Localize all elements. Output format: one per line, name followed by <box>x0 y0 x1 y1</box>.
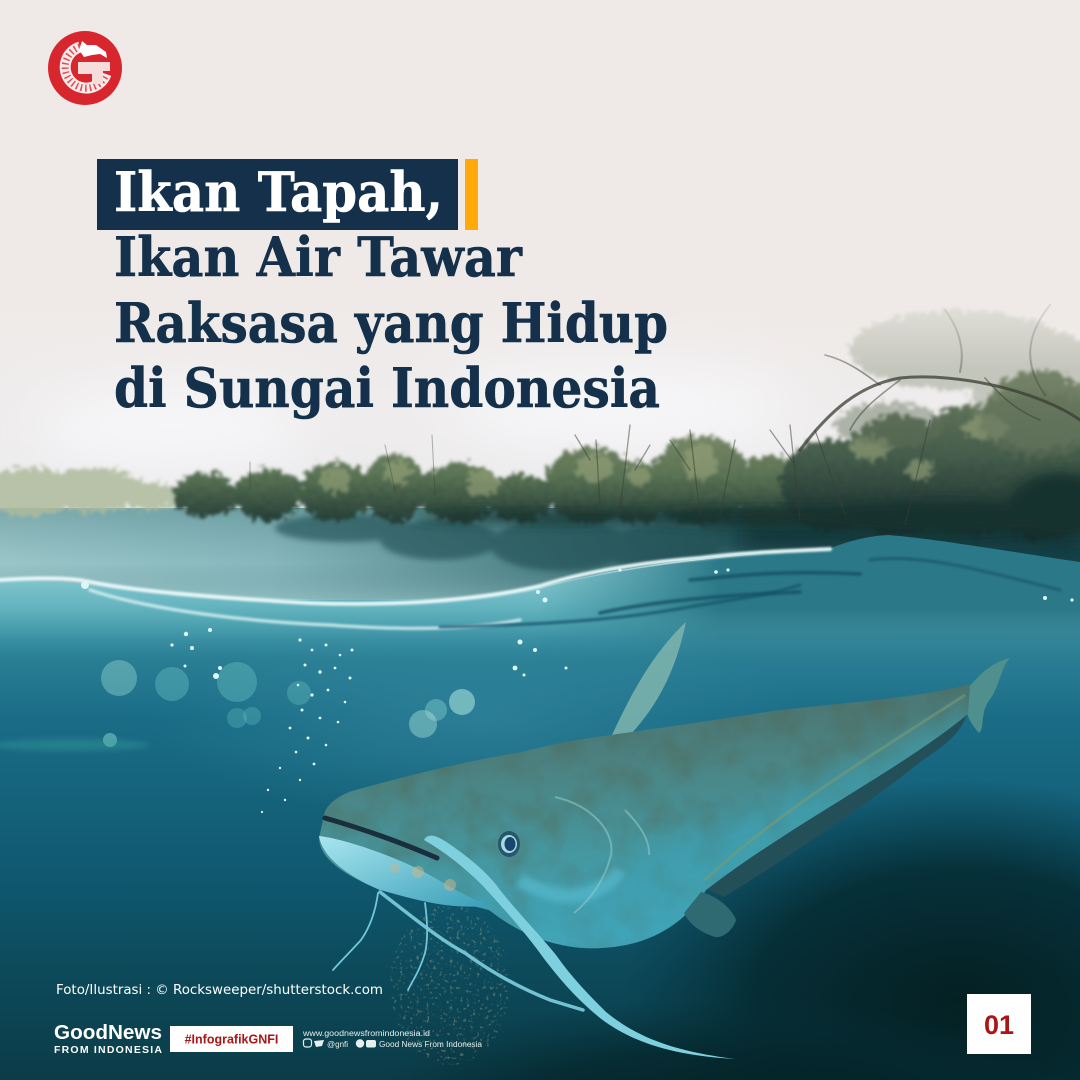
logo ring pattern <box>65 47 106 88</box>
brand wordmark <box>54 1022 162 1056</box>
logo ring <box>65 47 106 88</box>
website and social handles <box>302 1029 483 1049</box>
title highlight bar <box>97 159 458 230</box>
underwater body <box>0 600 1080 1080</box>
brand wordmark: GoodNews <box>54 1022 162 1044</box>
fish: eye <box>498 831 520 857</box>
water swell on the right <box>558 535 1080 647</box>
logo eagle head <box>79 41 107 58</box>
water surface highlight line <box>0 549 1060 628</box>
photo background: sky <box>0 0 1080 540</box>
website and social handles: www.goodnewsfromindonesia.id <box>302 1029 430 1038</box>
logo G bar <box>78 62 110 84</box>
fish: pectoral fin <box>684 892 736 937</box>
tree branches <box>250 305 1080 525</box>
dark shoreline foliage <box>410 473 1080 537</box>
river bank tree mass <box>173 436 810 524</box>
riverbed sand particles <box>390 863 510 1065</box>
fish: thin barbels <box>333 892 583 1010</box>
hashtag badge <box>170 1026 293 1052</box>
fish: long anal fin <box>704 708 968 897</box>
fish: dorsal fin <box>611 622 686 737</box>
title line 3: Raksasa yang Hidup <box>114 291 668 355</box>
haze over the tree tops <box>760 275 1080 370</box>
far left pale trees <box>0 468 180 516</box>
orange accent <box>465 159 478 230</box>
fish: tail fin <box>966 658 1010 733</box>
page number <box>967 994 1031 1054</box>
air bubbles <box>81 568 1074 813</box>
fish: body <box>310 680 980 960</box>
page number: 01 <box>984 1010 1014 1040</box>
dark riverbed lower right <box>340 770 1080 1080</box>
fish: lower jaw <box>319 836 489 907</box>
title line 2: Ikan Air Tawar <box>114 225 522 289</box>
fish: mouth <box>325 818 437 858</box>
lit water centre <box>150 620 810 820</box>
website and social handles: @gnfi <box>327 1040 348 1049</box>
title line 1: Ikan Tapah, <box>114 160 443 224</box>
clouds <box>30 370 800 460</box>
photo credit: Foto/Ilustrasi : © Rocksweeper/shutterstock.com <box>56 983 383 998</box>
fish: main barbel <box>424 836 735 1059</box>
bokeh lights <box>0 660 475 751</box>
right bank dense trees <box>780 370 1080 540</box>
title block <box>97 159 668 420</box>
hashtag badge: #InfografikGNFI <box>185 1032 278 1046</box>
sunlit foliage highlights <box>319 416 1007 498</box>
logo <box>48 31 122 105</box>
pale band below the waterline <box>0 550 1080 660</box>
lake surface with reflections <box>0 508 1080 618</box>
brand wordmark: FROM INDONESIA <box>54 1044 162 1056</box>
title line 4: di Sungai Indonesia <box>114 356 660 420</box>
website and social handles: Good News From Indonesia <box>379 1040 483 1049</box>
tall hazy tree on the right <box>835 310 1080 457</box>
